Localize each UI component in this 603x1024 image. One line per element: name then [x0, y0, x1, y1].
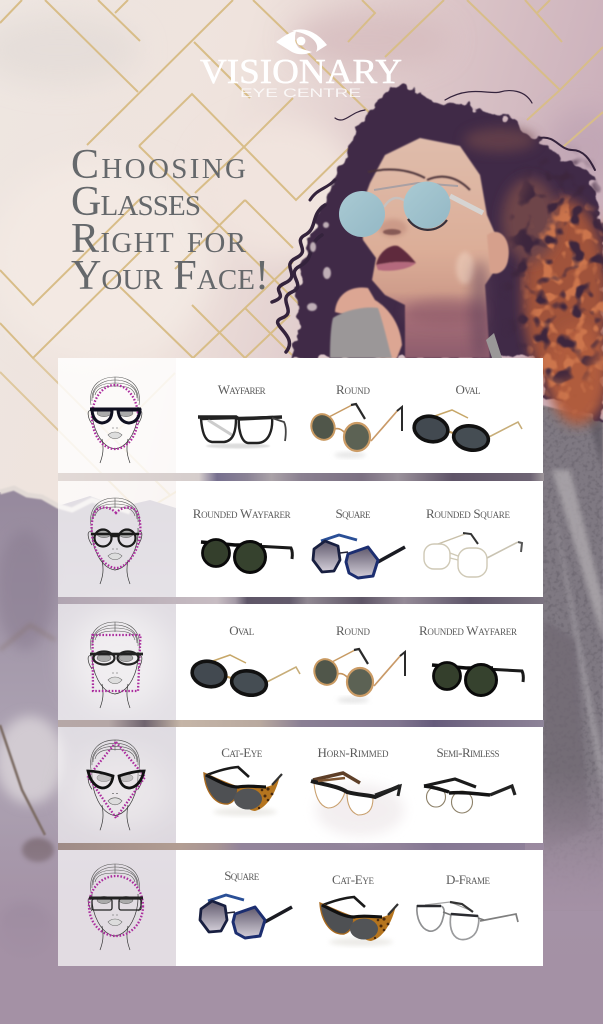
label: Semi-Rimless: Semi-Rimless — [436, 745, 500, 760]
glasses: round — [308, 404, 402, 458]
label: Oval: Oval — [229, 623, 254, 638]
bottom fade to solid mauve — [0, 770, 603, 1024]
glasses: d-frame — [417, 902, 518, 940]
face illustration: diamond — [88, 740, 145, 830]
gaps between rows: bands of photo texture — [58, 473, 544, 850]
label: Rounded Square: Rounded Square — [426, 506, 510, 521]
face column — [58, 358, 176, 473]
woman: hand and sweater sleeve — [330, 287, 502, 358]
glasses column — [176, 481, 543, 597]
woman: left side curl strands — [272, 91, 595, 352]
woman: face and neck — [360, 138, 509, 360]
panel: row 2 heart face — [58, 481, 543, 597]
label: Rounded Wayfarer: Rounded Wayfarer — [193, 506, 291, 521]
glasses: rounded wayfarer — [432, 662, 523, 696]
glasses column — [176, 604, 543, 720]
glasses column — [176, 727, 543, 843]
label: D-Frame: D-Frame — [446, 872, 490, 887]
logo subtitle: EYE CENTRE — [240, 88, 362, 100]
glasses: cat-eye — [204, 767, 282, 816]
glasses: semi-rimless — [424, 779, 515, 813]
face illustration: oval — [88, 864, 143, 950]
woman: dark curl texture — [508, 155, 603, 385]
label: Round: Round — [336, 623, 370, 638]
glasses: square — [313, 535, 405, 578]
label: Square: Square — [336, 506, 371, 521]
background: clouded sky — [0, 0, 603, 520]
label: Cat-Eye: Cat-Eye — [221, 745, 263, 760]
woman: copper base of hair — [464, 128, 603, 425]
panel: row 4 diamond face — [58, 727, 543, 843]
label: Round: Round — [336, 382, 370, 397]
title — [71, 142, 269, 299]
face illustration: heart — [88, 498, 142, 584]
glasses: cat-eye — [320, 897, 398, 946]
label: Horn-Rimmed: Horn-Rimmed — [318, 745, 389, 760]
icon: eye — [276, 29, 327, 54]
panel: row 1 round face — [58, 358, 543, 473]
face illustration: round — [88, 377, 142, 463]
label: Cat-Eye: Cat-Eye — [332, 872, 374, 887]
face column — [58, 604, 176, 720]
glasses column — [176, 358, 543, 473]
title: Right for — [71, 216, 247, 262]
woman: copper curl texture — [528, 200, 603, 410]
woman: curly hair — [272, 86, 603, 425]
title: Choosing — [71, 142, 246, 188]
woman: background gaps in curls — [307, 222, 331, 311]
glasses: horn-rimmed — [311, 773, 404, 836]
background: gold geometric lines — [0, 0, 603, 510]
background: misty lower landscape — [0, 470, 603, 1024]
face column — [58, 850, 176, 966]
title: Your Face! — [71, 253, 269, 299]
logo wordmark: VISIONARY — [200, 52, 402, 91]
glasses: rounded wayfarer — [201, 540, 292, 572]
label: Rounded Wayfarer: Rounded Wayfarer — [419, 623, 517, 638]
glasses: square — [200, 895, 292, 938]
label: Wayfarer: Wayfarer — [218, 382, 266, 397]
label: Oval: Oval — [456, 382, 480, 397]
face illustration: square — [88, 622, 143, 708]
face column — [58, 481, 176, 597]
title: Glasses — [71, 179, 201, 225]
logo: Visionary Eye Centre — [200, 29, 402, 100]
glasses: round — [311, 649, 405, 703]
glasses: oval — [412, 410, 522, 453]
woman: mirrored round sunglasses — [339, 182, 483, 237]
glasses: wayfarer — [198, 417, 286, 448]
glasses: rounded square wire — [424, 533, 522, 577]
glasses column — [176, 850, 543, 966]
face column — [58, 727, 176, 843]
woman: lips — [376, 246, 416, 271]
panel: row 5 oval face — [58, 850, 543, 966]
woman: coat on the right — [500, 395, 603, 910]
label: Square: Square — [224, 868, 260, 883]
glasses: oval — [190, 655, 300, 698]
panel: row 3 square face — [58, 604, 543, 720]
